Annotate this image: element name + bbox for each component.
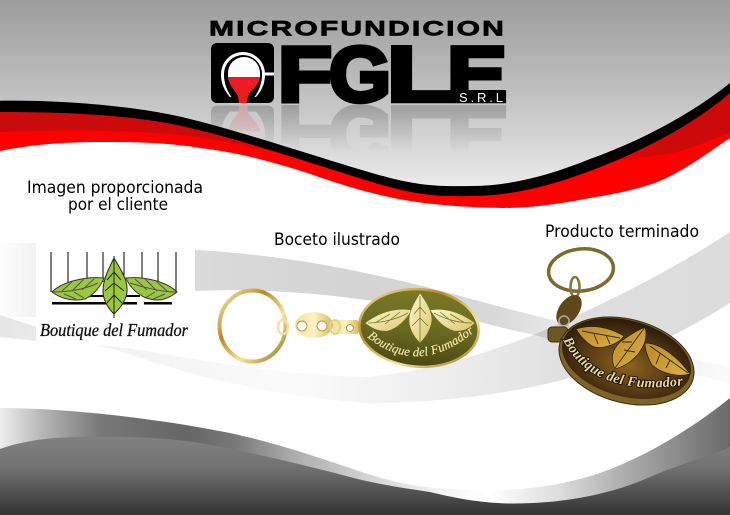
logo: Microfundicion FGLE <box>209 18 507 118</box>
sketch keychain <box>218 288 480 368</box>
swoosh: lower light band <box>0 232 730 403</box>
black wave <box>0 83 730 196</box>
caption: finished product: Producto terminado <box>545 222 699 242</box>
product medal <box>558 316 694 406</box>
finished product keychain <box>546 247 694 406</box>
product small link <box>570 277 580 297</box>
sketch ring <box>220 290 286 362</box>
header grey gradient <box>0 0 730 190</box>
logo letters FGLE: E <box>447 30 507 118</box>
logo reflection <box>211 104 506 143</box>
caption: sketch: Boceto ilustrado <box>274 230 400 250</box>
product ring <box>546 246 616 294</box>
logo reflection: G <box>329 90 391 178</box>
logo letters FGLE: L <box>387 30 451 118</box>
logo suffix S.R.L: S.R.L <box>459 90 503 105</box>
sketch medal <box>358 288 480 368</box>
product medal name: Boutique del Fumador <box>562 336 684 388</box>
logo icon: ladle <box>211 43 274 103</box>
sketch medal leaves <box>365 309 412 331</box>
faint panel left <box>0 243 36 317</box>
logo centre leaf <box>103 256 127 318</box>
logo reflection: E <box>447 90 507 178</box>
logo right leaves <box>126 278 177 300</box>
footer: dark wave <box>0 437 730 515</box>
red wave <box>0 88 730 208</box>
logo letters FGLE <box>278 30 507 118</box>
caption: client image: Imagen proporcionada <box>27 178 203 198</box>
logo left leaves <box>52 278 104 300</box>
logo vertical lines and bars <box>51 252 176 304</box>
logo wordmark top: MICROFUNDICION <box>209 18 506 40</box>
logo letters FGLE: F <box>278 30 332 118</box>
logo letters FGLE: G <box>329 30 391 118</box>
logo reflection: L <box>387 90 451 178</box>
client logo: Boutique del Fumador <box>36 243 192 345</box>
footer: silver wave <box>0 398 730 515</box>
sketch chain links <box>278 312 359 338</box>
sketch medal name: Boutique del Fumador <box>367 327 472 356</box>
logo reflection: F <box>278 90 332 178</box>
logo name: Boutique del Fumador <box>40 320 189 340</box>
caption: client image: por el cliente <box>68 195 168 215</box>
swoosh: upper grey band <box>195 250 730 383</box>
product oval link <box>548 290 587 342</box>
product medal leaves <box>576 327 624 347</box>
